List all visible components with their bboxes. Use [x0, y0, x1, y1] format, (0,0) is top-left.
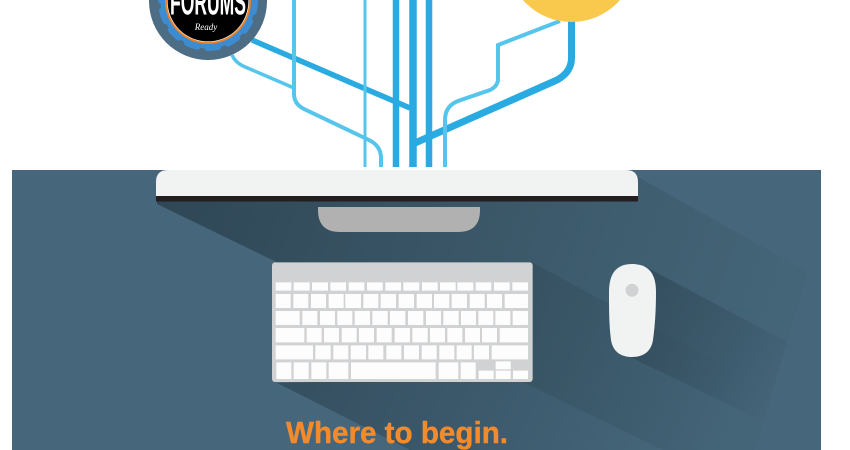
keyboard	[272, 262, 533, 382]
connector lines: light blue	[232, 0, 560, 167]
keys	[276, 282, 528, 379]
panel: desk background	[12, 170, 821, 450]
yellow circle	[507, 0, 636, 22]
logo tagline: Ready	[194, 22, 217, 32]
connector lines: dark blue	[252, 0, 572, 167]
mouse long shadow	[631, 268, 748, 390]
monitor	[156, 170, 638, 232]
keyboard body	[272, 262, 533, 382]
mouse body	[609, 264, 656, 357]
monitor bezel	[156, 170, 638, 196]
mouse scroll dot	[626, 284, 638, 297]
monitor long shadow	[157, 177, 704, 416]
monitor bottom edge	[156, 196, 638, 202]
monitor stand	[318, 207, 480, 232]
keyboard long shadow	[278, 264, 590, 450]
logo badge: forums	[149, 0, 267, 60]
heading: Where to begin.	[286, 415, 508, 450]
mouse	[609, 264, 656, 357]
